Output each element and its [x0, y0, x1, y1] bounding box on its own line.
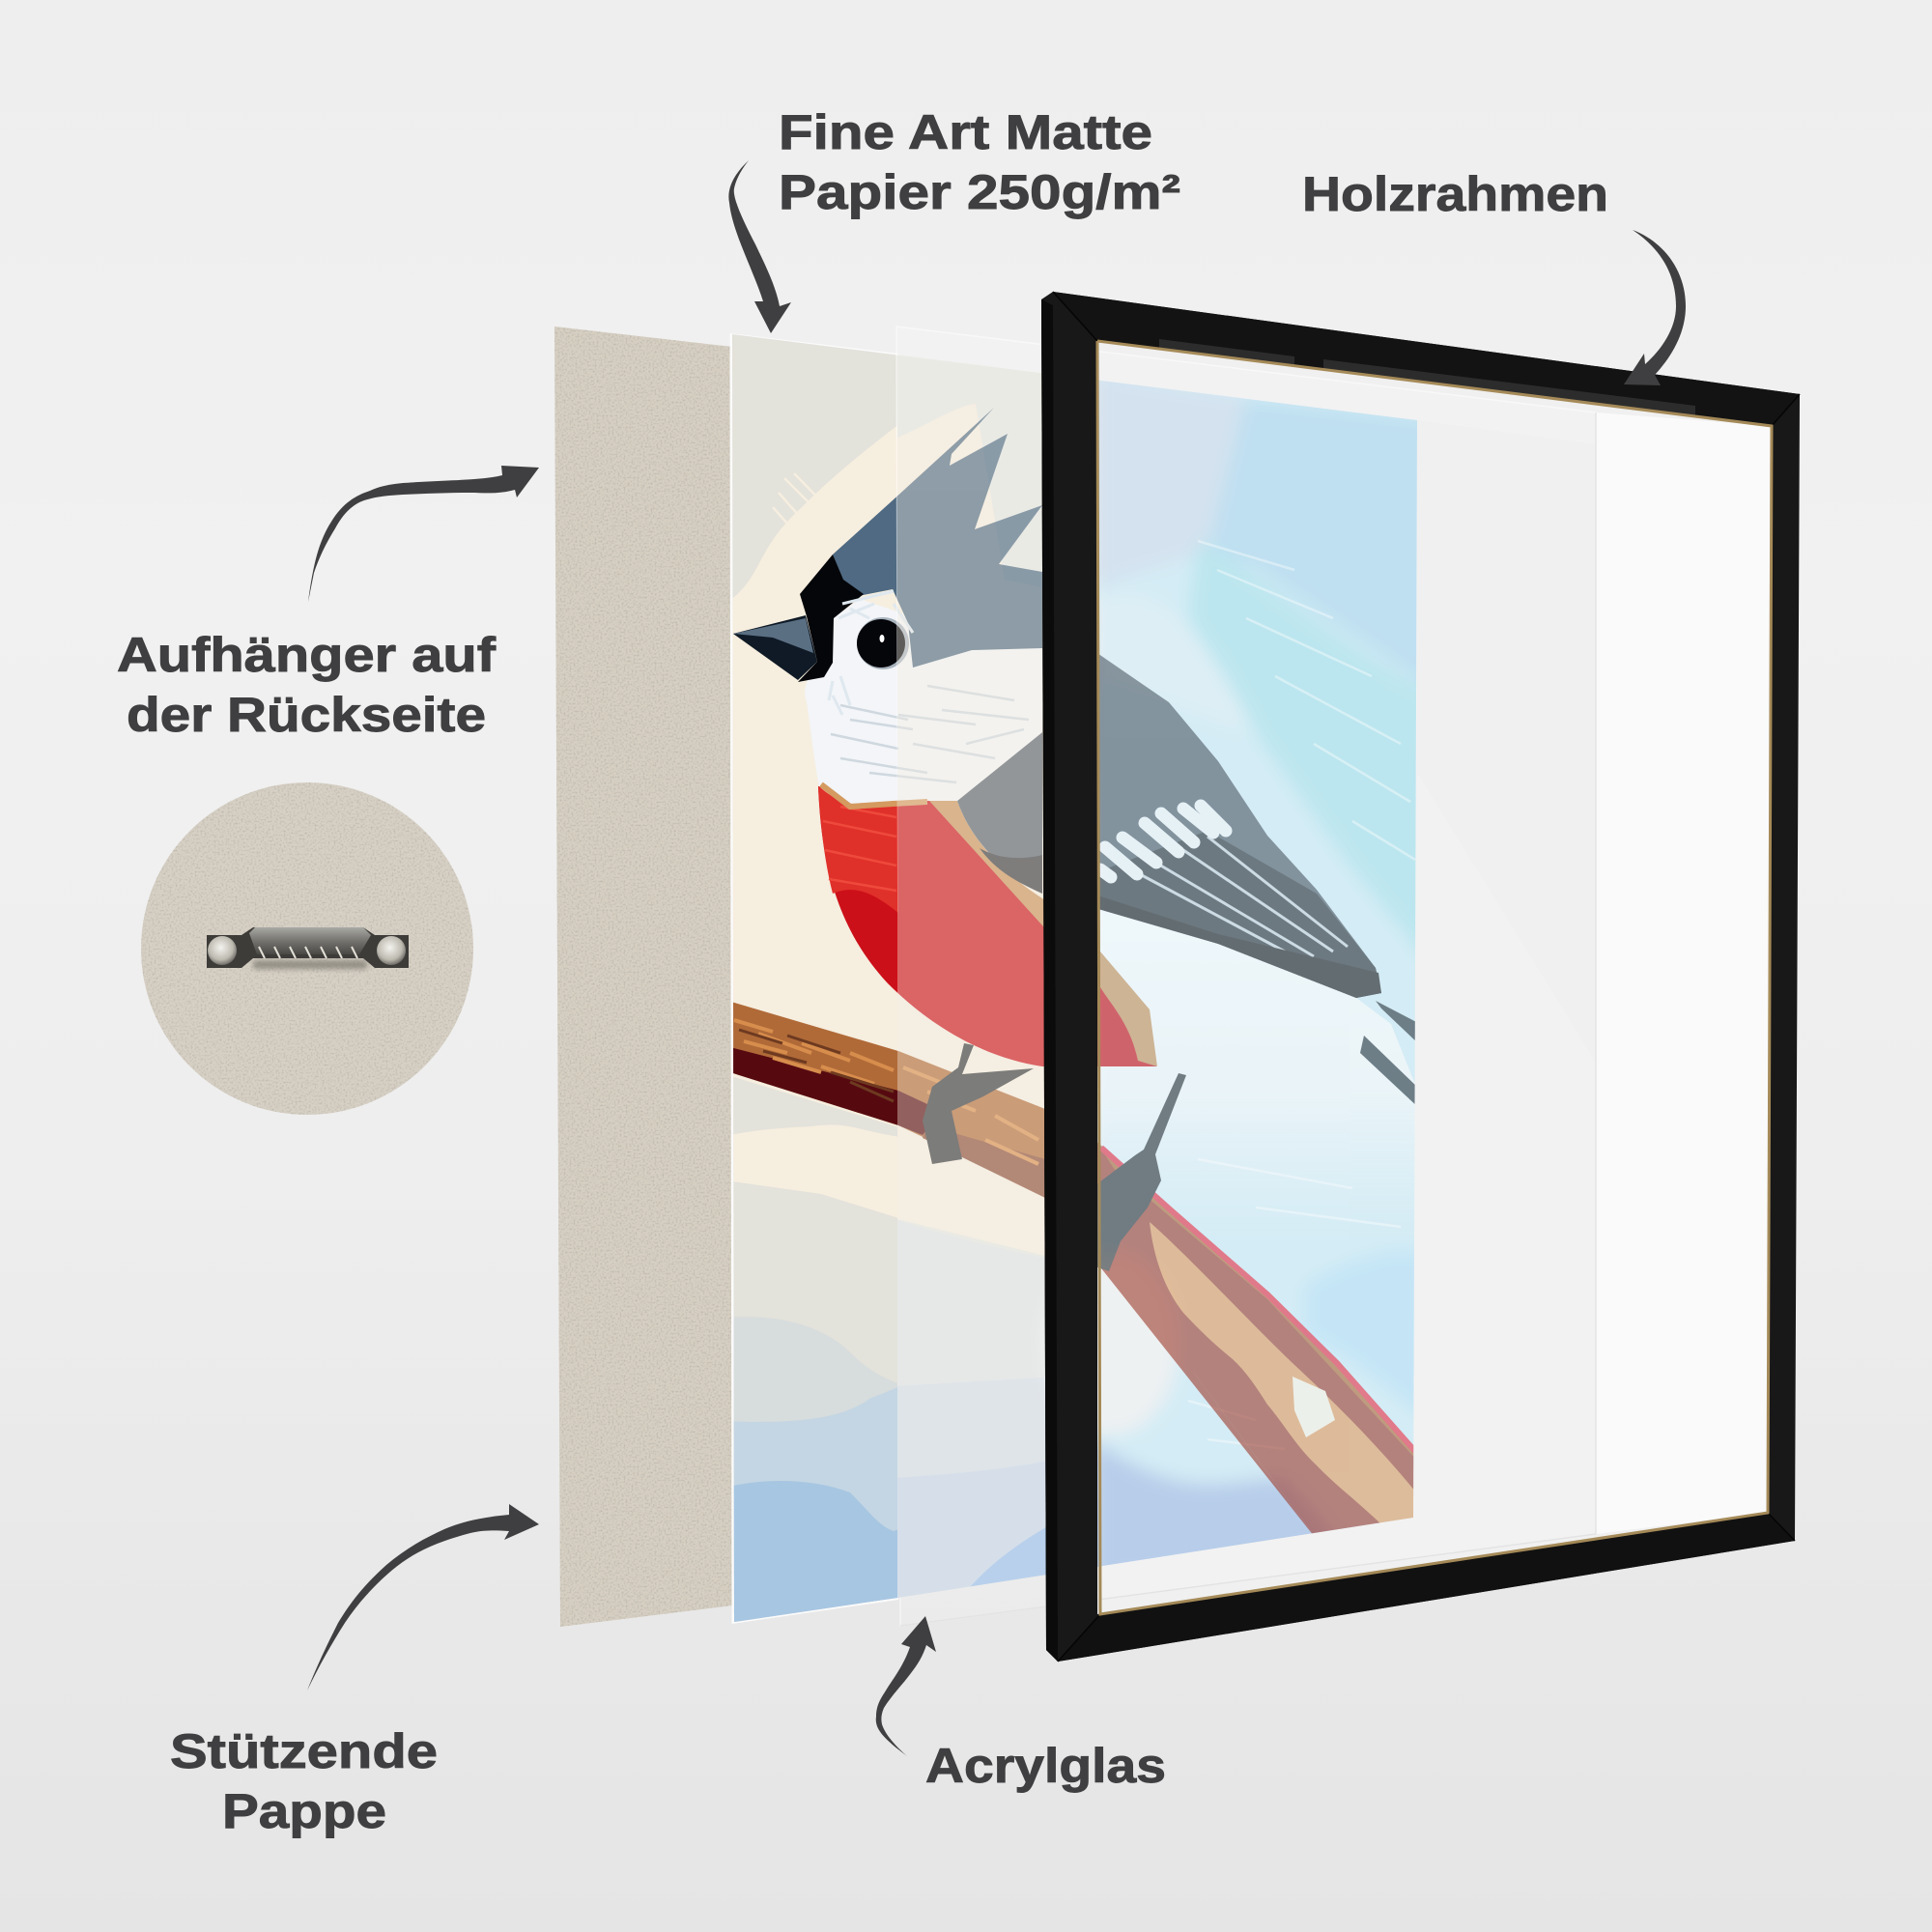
print background: left colour bands — [732, 334, 897, 1622]
arrow: acrylic glass — [876, 1616, 936, 1756]
label: hanger on the back — [117, 628, 496, 742]
crest and head — [833, 408, 1042, 668]
face streaks — [829, 591, 913, 715]
branch — [733, 1003, 1414, 1534]
tail — [1360, 1001, 1420, 1109]
legs and feet — [923, 1043, 1186, 1271]
label: hanger on the back: der Rückseite — [127, 688, 486, 742]
frame: black wooden frame — [1041, 292, 1800, 1662]
label: backing cardboard — [170, 1724, 438, 1838]
wing — [1092, 649, 1381, 998]
label: wooden frame: Holzrahmen — [1302, 167, 1608, 221]
label: fine art matte paper: Papier 250g/m² — [779, 165, 1180, 219]
label: acrylic glass: Acrylglas — [925, 1739, 1166, 1793]
panel: fine art print, uncovered section — [732, 334, 897, 1622]
label: fine art matte paper: Fine Art Matte — [779, 105, 1152, 159]
panel: mat inside the frame — [1097, 341, 1772, 1614]
label: hanger on the back: Aufhänger auf — [117, 628, 496, 682]
sky feather hatching — [1188, 541, 1415, 1449]
panel: paper edge highlight — [730, 333, 898, 1624]
sawtooth hanger — [207, 927, 409, 969]
grey side — [957, 732, 1042, 894]
panel: acrylic glass sheet — [896, 327, 1596, 1626]
panel: backing cardboard — [554, 327, 732, 1627]
beak — [733, 615, 817, 680]
belly — [818, 786, 1156, 1066]
arrow: wooden frame — [1624, 230, 1686, 385]
chest and cheek — [805, 599, 1042, 807]
bird seen through the acrylic — [715, 408, 1439, 1565]
panel: print seen through the acrylic — [715, 348, 1439, 1604]
eye — [857, 617, 909, 669]
label: backing cardboard: Pappe — [222, 1784, 386, 1838]
bird illustration — [715, 408, 1439, 1565]
cardboard circle — [141, 782, 473, 1115]
tan flank — [929, 801, 1157, 1066]
arrow: hanger on the back — [308, 466, 539, 602]
hanger detail circle — [141, 782, 473, 1115]
forehead mask — [798, 554, 864, 682]
label: backing cardboard: Stützende — [170, 1724, 438, 1778]
lower body — [1097, 910, 1414, 1182]
arrow: fine art paper — [728, 160, 791, 333]
sky background inside the frame — [1043, 357, 1439, 1584]
label: fine art matte paper — [779, 105, 1180, 219]
arrow: backing cardboard — [307, 1504, 539, 1690]
print background: right colour bands — [894, 348, 1101, 1604]
